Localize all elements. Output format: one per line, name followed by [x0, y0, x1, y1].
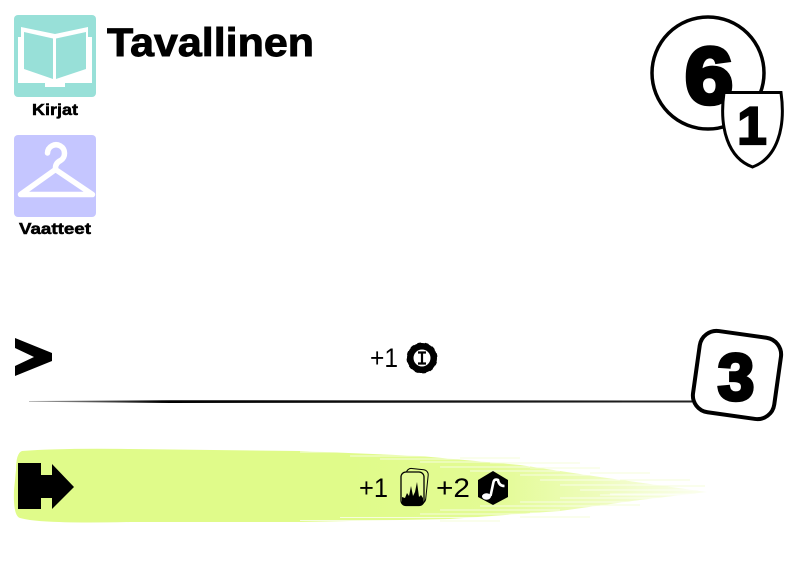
number card: 3: 3 — [718, 340, 754, 414]
effect: +1 card +2 music — [359, 468, 508, 506]
number card: 3 — [691, 329, 783, 421]
icon: clothing category — [14, 135, 96, 217]
shield — [723, 92, 782, 167]
cost circle — [652, 17, 764, 129]
divider line — [29, 400, 692, 403]
brush stroke band — [14, 449, 707, 522]
cost badge: circle with 6 and shield with 1 — [652, 17, 782, 167]
label: Vaatteet: Vaatteet — [19, 221, 92, 238]
text: +2: +2 — [436, 473, 470, 503]
cost number 6: 6 — [685, 31, 733, 120]
icon: music hexagon — [478, 471, 508, 505]
icon: greater-than chevron — [15, 338, 52, 376]
effect: +1 coin — [370, 342, 438, 374]
icon: coin — [406, 342, 438, 374]
text: +1: +1 — [370, 343, 398, 373]
icon: books category — [14, 15, 96, 97]
title: Tavallinen — [107, 21, 314, 65]
icon: production arrow — [18, 463, 74, 509]
label: Kirjat: Kirjat — [32, 102, 79, 119]
text: +1: +1 — [359, 473, 388, 503]
shield number 1: 1 — [737, 97, 767, 156]
icon: card — [401, 468, 429, 506]
